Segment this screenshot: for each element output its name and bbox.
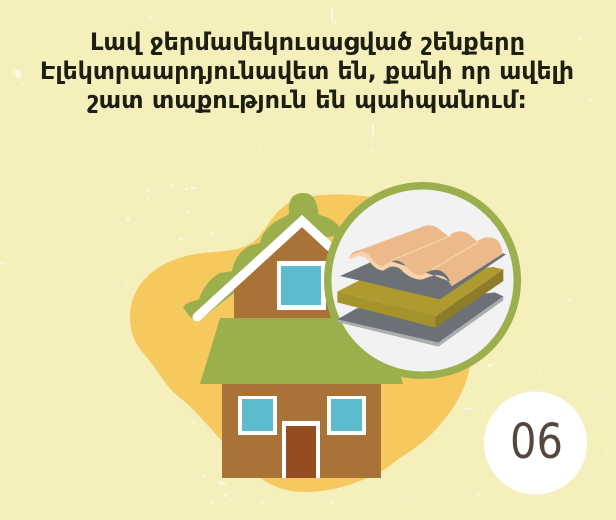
lower house (200, 318, 403, 478)
number badge: 06 (510, 414, 563, 470)
title: շատ տաքություն են պահպանում: (87, 86, 527, 114)
bottom membrane layer (337, 292, 503, 347)
title (40, 28, 574, 114)
green bushes on roof (183, 193, 345, 322)
roof tiles (348, 225, 502, 286)
left window (238, 396, 277, 435)
attic window (277, 261, 326, 310)
yellow blob background (130, 194, 480, 492)
roof insulation circle (328, 186, 517, 375)
door (282, 421, 320, 478)
roof trim (197, 221, 330, 317)
upper wall (234, 222, 335, 318)
title: Էլեկտրաարդյունավետ են, քանի որ ավելի (40, 57, 574, 85)
right window (327, 396, 366, 435)
main roof (200, 318, 403, 384)
number badge (484, 392, 587, 494)
title: Լավ ջերմամեկուսացված շենքերը (90, 28, 525, 56)
upper house (183, 193, 345, 322)
insulation layer (337, 267, 503, 328)
upper membrane layer (340, 252, 506, 299)
lower wall (222, 384, 381, 478)
